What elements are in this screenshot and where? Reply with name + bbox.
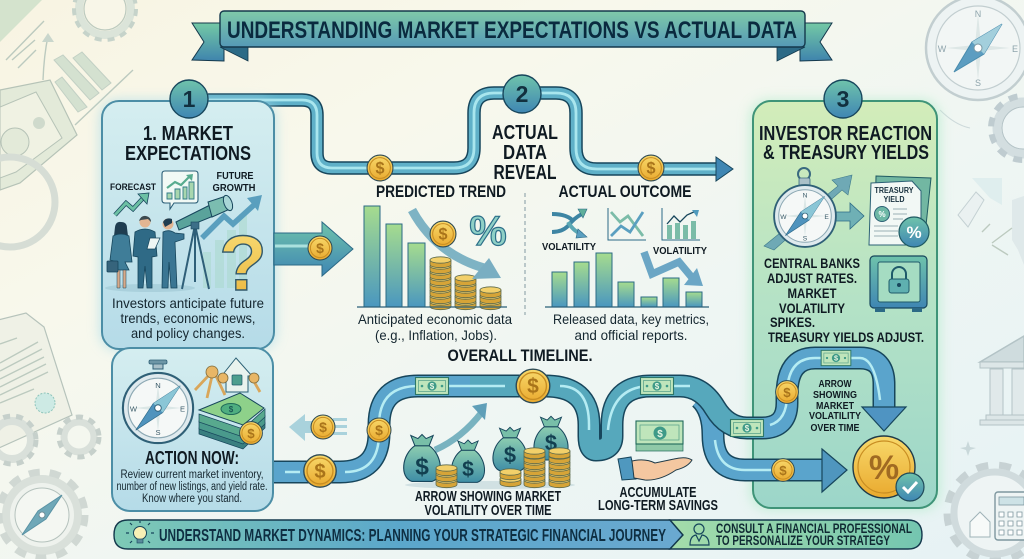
coin stacks	[430, 257, 501, 310]
text: market expectations body: and policy changes.	[131, 325, 245, 341]
icon: bill on pipeline	[416, 378, 448, 394]
heading: market expectations: EXPECTATIONS	[125, 143, 251, 165]
text: investor reaction body: MARKET	[788, 286, 837, 301]
icon: bill above hand: $	[657, 429, 663, 440]
icon: coin on top pipeline right	[638, 155, 664, 181]
title banner	[192, 11, 832, 61]
icon: chart bubble	[162, 171, 198, 209]
heading: actual data reveal: ACTUAL	[492, 122, 558, 144]
icon: safe with lock	[870, 256, 927, 312]
text: action now body: Know where you stand.	[142, 493, 242, 505]
title: UNDERSTANDING MARKET EXPECTATIONS VS ACTUAL DATA	[227, 17, 797, 44]
text: investor reaction body: ADJUST RATES.	[767, 271, 857, 286]
text: action now body: number of new listings, and yield rate.	[116, 481, 268, 493]
icon: percent coin with check: %	[869, 449, 899, 487]
badge: step 2	[503, 75, 541, 113]
icon: percent: %	[469, 207, 507, 254]
text: bags caption: VOLATILITY OVER TIME	[424, 502, 552, 519]
heading: predicted trend: PREDICTED TREND	[376, 182, 506, 201]
badge: step 3: 3	[837, 86, 849, 112]
icon: compass: S	[155, 428, 161, 437]
icon: advisor	[690, 524, 709, 545]
icon: volatility shuffle	[552, 209, 587, 238]
icon: treasury yield document	[869, 176, 931, 247]
heading: investor reaction: INVESTOR REACTION	[759, 123, 932, 145]
text: actual outcome body: and official reports.	[574, 327, 688, 343]
text: action now body	[116, 469, 268, 505]
text: savings caption	[598, 484, 718, 514]
text: actual outcome body	[553, 311, 709, 343]
icon: coin	[240, 422, 262, 444]
text: footer left: UNDERSTAND MARKET DYNAMICS: PLANNING YOUR STRATEGIC FINANCIAL JOURNEY	[159, 525, 666, 545]
icon: coin above faded arrow: $	[319, 419, 327, 435]
icon: compass: W	[130, 405, 138, 414]
text: market expectations body: Investors anticipate future	[112, 295, 264, 311]
icon: crossing line chart	[608, 208, 646, 240]
icon: large coin on pipeline	[304, 455, 336, 487]
chart: predicted trend bars	[357, 206, 507, 310]
icon: forecast arrow	[115, 193, 149, 215]
icon: lightbulb	[126, 521, 154, 543]
icon: bill on pipeline right	[640, 378, 674, 394]
text: investor reaction body: TREASURY YIELDS ADJUST.	[768, 330, 924, 345]
heading: investor reaction: & TREASURY YIELDS	[763, 142, 929, 164]
icon: bill on pipeline right: $	[655, 382, 660, 391]
decoration: right sketches: E	[1012, 44, 1018, 54]
icon: money bags and coins: $	[545, 431, 557, 456]
arrow: lower timeline pipeline	[274, 358, 906, 492]
icon: rising arrow over bags	[435, 403, 487, 450]
icon: open hand	[618, 457, 692, 480]
icon: compass with arrows: N	[803, 192, 808, 199]
icon: treasury yield document: TREASURY	[874, 186, 914, 195]
panel: market expectations	[100, 80, 276, 350]
icon: money bags and coins	[404, 416, 575, 489]
icon: bill entering panel 3: $	[745, 424, 750, 433]
icon: rising mini chart	[662, 208, 700, 240]
badge: step 1: 1	[183, 86, 196, 112]
arrow: top pipeline from step 1 through step 2	[208, 93, 733, 181]
icon: question mark: ?	[219, 219, 267, 307]
heading: actual data reveal	[492, 122, 558, 184]
label: volatility left: VOLATILITY	[542, 242, 596, 253]
icon: cash stack	[199, 393, 265, 449]
icon: bill on loop arrow: $	[834, 354, 838, 363]
icon: coin	[430, 221, 456, 247]
text: bags caption	[415, 488, 561, 519]
text: investor reaction body	[764, 256, 924, 345]
icon: keys and house	[195, 358, 260, 398]
text: loop arrow label	[809, 378, 861, 434]
icon: percent coin with check	[853, 436, 924, 501]
text: predicted trend body: (e.g., Inflation, Jobs).	[375, 327, 497, 343]
text: investor reaction body: SPIKES.	[770, 315, 815, 330]
icon: coin: $	[438, 225, 448, 243]
badge: step 3	[824, 80, 862, 118]
heading: actual data reveal: DATA	[503, 142, 547, 164]
label: volatility right: VOLATILITY	[653, 246, 707, 257]
badge: step 2: 2	[516, 81, 528, 107]
text: loop arrow label: SHOWING	[813, 389, 857, 401]
text: market expectations body	[112, 295, 264, 341]
text: market expectations body: trends, economic news,	[120, 310, 256, 326]
icon: coin on lower arrow: $	[779, 463, 787, 478]
icon: coin on loop arrow	[776, 381, 798, 403]
icon: bill above hand	[636, 421, 683, 451]
icon: compass with arrows: E	[824, 214, 829, 221]
decoration: right sketches	[926, 0, 1024, 559]
text: predicted trend body: Anticipated economic data	[358, 311, 512, 327]
text: footer right: TO PERSONALIZE YOUR STRATEGY	[716, 533, 890, 548]
arrow: step 1 to step 2: $	[316, 240, 324, 256]
icon: money bags and coins: $	[504, 442, 516, 467]
icon: growth arrow	[202, 195, 262, 288]
icon: treasury yield document: %	[878, 210, 886, 219]
icon: coin: $	[247, 426, 255, 441]
chart: actual outcome bars	[545, 252, 709, 307]
icon: treasury yield document: %	[906, 223, 922, 242]
icon: investors group	[105, 216, 195, 292]
icon: bill on pipeline: $	[430, 382, 435, 391]
icon: coin at pipeline top	[516, 369, 550, 403]
icon: compass: E	[180, 405, 185, 414]
icon: coin at pipeline top: $	[527, 375, 539, 398]
icon: money bags and coins: $	[415, 453, 429, 480]
icon: bill on loop arrow	[821, 350, 851, 366]
icon: large coin on pipeline: $	[314, 461, 326, 483]
label: future growth: FUTURE	[216, 171, 254, 182]
heading: overall timeline: OVERALL TIMELINE.	[448, 346, 592, 365]
arrow: faded back arrow	[289, 414, 347, 441]
arrow: zigzag decline	[644, 252, 703, 286]
text: savings caption: LONG-TERM SAVINGS	[598, 497, 718, 514]
heading: market expectations	[125, 123, 251, 165]
heading: action now: ACTION NOW:	[145, 448, 239, 468]
icon: coin on top pipeline left: $	[375, 159, 385, 177]
text: action now body: Review current market inventory,	[120, 469, 264, 481]
icon: compass with arrows	[764, 168, 864, 250]
icon: coin above faded arrow	[311, 415, 335, 439]
icon: compass: N	[155, 381, 161, 390]
label: future growth	[212, 171, 256, 194]
text: loop arrow label: MARKET	[816, 400, 854, 412]
decoration: right sketches: S	[975, 78, 981, 88]
heading: actual data reveal: REVEAL	[494, 162, 556, 184]
decoration: right sketches: N	[975, 9, 981, 19]
text: investor reaction body: VOLATILITY	[779, 301, 845, 316]
heading: market expectations: 1. MARKET	[143, 123, 233, 145]
label: forecast: FORECAST	[110, 182, 156, 193]
text: bags caption: ARROW SHOWING MARKET	[415, 488, 561, 505]
icon: coin on loop arrow: $	[783, 385, 791, 400]
icon: compass	[123, 360, 193, 443]
text: loop arrow label: ARROW	[818, 378, 852, 390]
footer banner	[114, 520, 922, 549]
text: predicted trend body	[358, 311, 512, 343]
icon: compass with arrows: W	[780, 214, 787, 221]
icon: coin on lower arrow	[772, 459, 794, 481]
text: loop arrow label: OVER TIME	[810, 422, 860, 434]
icon: money bags and coins: $	[462, 458, 474, 481]
text: loop arrow label: VOLATILITY	[809, 410, 861, 422]
decoration: left sketches	[0, 0, 136, 558]
heading: actual outcome: ACTUAL OUTCOME	[558, 182, 692, 201]
icon: compass with arrows: S	[803, 236, 808, 243]
panel: action now	[112, 348, 273, 511]
icon: coin on pipeline bend: $	[375, 422, 383, 438]
panel: investor reaction and treasury yields	[750, 100, 940, 510]
icon: cash stack: $	[229, 405, 234, 414]
text: footer right: CONSULT A FINANCIAL PROFESSIONAL	[716, 521, 912, 536]
text: savings caption: ACCUMULATE	[620, 484, 696, 501]
decoration: right sketches: W	[938, 44, 947, 54]
icon: telescope	[176, 194, 234, 289]
badge: step 1	[170, 80, 208, 118]
heading: investor reaction	[759, 123, 932, 164]
arrow: falling trend	[412, 210, 501, 279]
text: actual outcome body: Released data, key metrics,	[553, 311, 709, 327]
icon: coin on top pipeline right: $	[646, 159, 656, 177]
arrow: step 1 to step 2	[274, 222, 353, 276]
icon: coin on pipeline bend	[367, 418, 391, 442]
label: future growth: GROWTH	[212, 183, 256, 194]
text: footer right	[716, 521, 912, 548]
icon: bill entering panel 3	[730, 420, 764, 436]
text: investor reaction body: CENTRAL BANKS	[764, 256, 860, 271]
icon: coin on top pipeline left	[367, 155, 393, 181]
icon: treasury yield document: YIELD	[884, 195, 905, 204]
